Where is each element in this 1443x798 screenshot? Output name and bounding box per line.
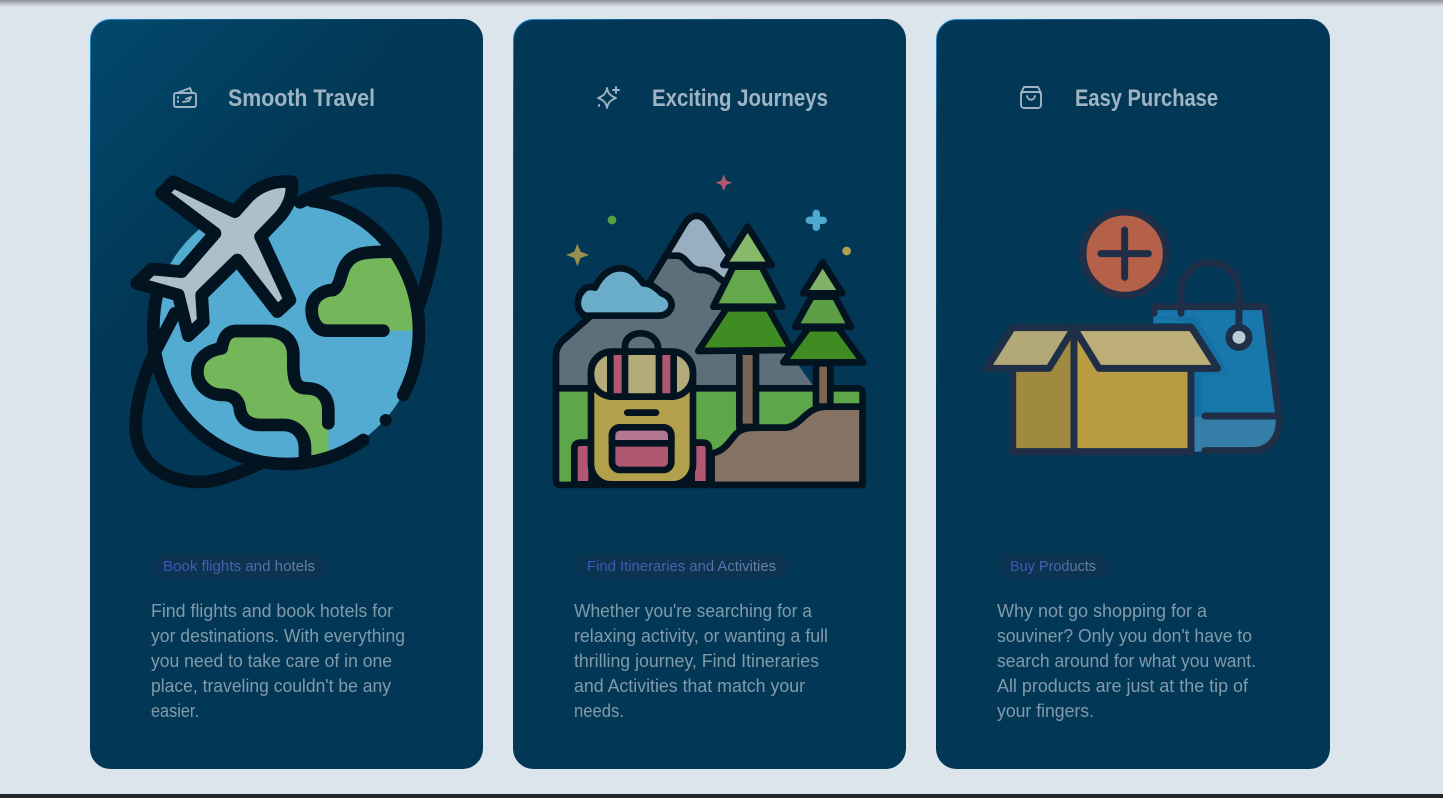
illustration: box and shopping bag xyxy=(987,212,1279,452)
tag: Find Itineraries and Activities xyxy=(574,554,789,578)
text block: your fingers. xyxy=(997,701,1094,721)
text block: Why not go shopping for a xyxy=(997,601,1208,621)
tag: Find Itineraries and Activities: Find Itineraries and Activities xyxy=(587,558,776,575)
text block: yor destinations. With everything xyxy=(151,626,405,646)
text block xyxy=(151,601,405,721)
tag: Buy Products xyxy=(997,554,1110,578)
illustration: globe and airplane xyxy=(136,180,440,482)
text block: All products are just at the tip of xyxy=(997,676,1249,696)
heading: Exciting Journeys xyxy=(652,85,828,112)
text block: needs. xyxy=(574,701,624,721)
icon: ticket xyxy=(174,88,196,107)
text block: Whether you're searching for a xyxy=(574,601,813,621)
text block: place, traveling couldn't be any xyxy=(151,676,391,696)
icon: sparkles xyxy=(598,87,619,108)
text block xyxy=(997,601,1256,721)
tag: Book flights and hotels: Book flights and hotels xyxy=(163,558,315,575)
top window shadow xyxy=(0,0,1443,7)
tag: Buy Products: Buy Products xyxy=(1010,558,1096,575)
panel: Exciting Journeys xyxy=(514,20,906,768)
heading: Easy Purchase xyxy=(1075,85,1218,112)
heading: Smooth Travel xyxy=(228,85,375,112)
text block: relaxing activity, or wanting a full xyxy=(574,626,828,646)
text block: thrilling journey, Find Itineraries xyxy=(574,651,819,671)
text block: and Activities that match your xyxy=(574,676,805,696)
panel: Smooth Travel xyxy=(90,20,482,768)
illustration: mountains, trees and backpack xyxy=(556,174,863,485)
icon: shopping bag xyxy=(1021,87,1041,108)
text block xyxy=(574,601,828,721)
text block: Find flights and book hotels for xyxy=(151,601,393,621)
panel: Easy Purchase xyxy=(936,20,1330,768)
text block: you need to take care of in one xyxy=(151,651,392,671)
text block: souviner? Only you don't have to xyxy=(997,626,1252,646)
bottom dark bar xyxy=(0,794,1443,798)
text block: easier. xyxy=(151,701,199,721)
tag: Book flights and hotels xyxy=(151,554,328,578)
text block: search around for what you want. xyxy=(997,651,1256,671)
